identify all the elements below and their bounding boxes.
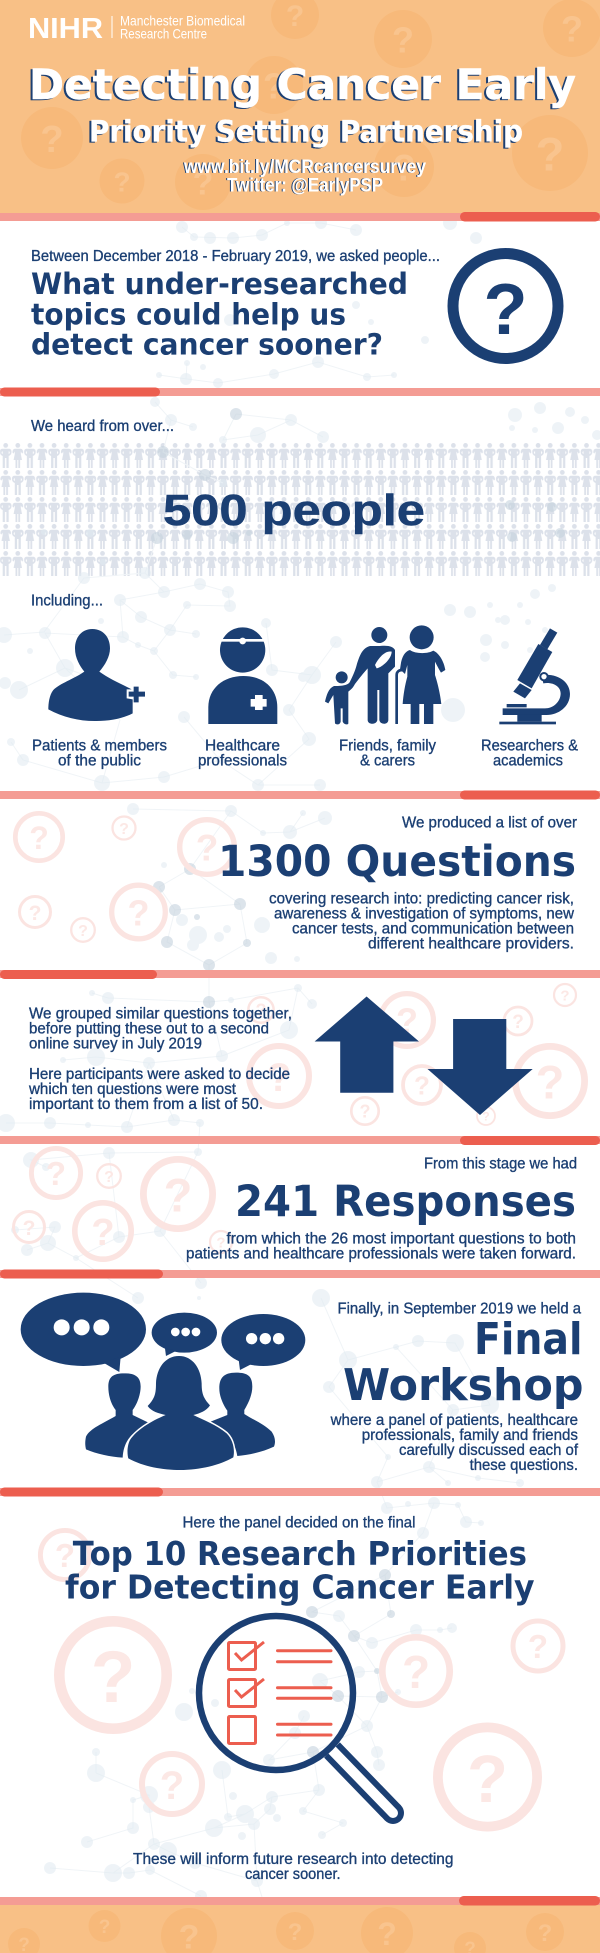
header question-mark bubbles: ? [393, 148, 415, 189]
logo: NIHR Manchester Biomedical Research Centre [28, 12, 245, 45]
footer band [0, 1905, 600, 1953]
question mark rings background: ? [91, 1637, 135, 1718]
question mark rings background: ? [256, 1001, 266, 1021]
icon: question mark ring [453, 254, 558, 358]
header question-mark bubbles: ? [536, 127, 564, 180]
label: healthcare professionals: Healthcare [205, 738, 280, 755]
divider 6 [0, 1270, 600, 1278]
icon: three people with speech bubbles [21, 1293, 305, 1470]
text: participants: which ten questions were most [28, 1081, 237, 1098]
intro sentence: Between December 2018 - February 2019, we asked people... [31, 248, 440, 265]
description: where a panel of patients, healthcare [330, 1412, 578, 1429]
question mark rings background: ? [536, 1055, 564, 1108]
question mark rings background: ? [29, 902, 41, 925]
question mark rings background: ? [360, 1102, 370, 1122]
logo: NIHR Manchester Biomedical Research Centre: Manchester Biomedical [120, 12, 245, 28]
description: professionals, family and friends [362, 1427, 578, 1444]
divider 1 [0, 212, 600, 222]
label: patients and public [32, 738, 167, 770]
lead-in text: Here the panel decided on the final [182, 1515, 416, 1532]
question mark rings background: ? [46, 1155, 66, 1192]
including text: Including... [31, 593, 103, 610]
panel: header band [0, 0, 600, 213]
question heading: What under-researched [31, 267, 408, 301]
question mark rings background: ? [23, 1217, 35, 1240]
text: participants [28, 1066, 290, 1113]
description: from which the 26 most important questions to both [226, 1230, 576, 1247]
label: healthcare professionals [198, 738, 287, 770]
logo: NIHR Manchester Biomedical Research Centre: Research Centre [120, 26, 207, 42]
header question-mark bubbles: ? [40, 119, 64, 161]
question mark rings background: ? [396, 1000, 418, 1041]
heading: Final Workshop [343, 1314, 584, 1411]
divider 2 [0, 388, 600, 396]
label: researchers and academics: Researchers & [481, 738, 578, 755]
question mark rings background: ? [560, 988, 570, 1005]
big number: 1300 Questions: 1300 Questions [218, 837, 576, 887]
question mark rings background: ? [512, 1012, 524, 1033]
header question-mark bubbles [21, 0, 600, 210]
question mark rings background: ? [482, 1109, 490, 1123]
text: grouped questions [29, 1005, 292, 1052]
panel: 1300 questions [218, 815, 578, 952]
question heading: topics could help us [31, 298, 346, 332]
heading: Top 10 Research Priorities: for Detecting Cancer Early [65, 1568, 535, 1607]
question mark rings background: ? [29, 820, 49, 856]
question mark rings background: ? [402, 1646, 430, 1698]
description: patients and healthcare professionals were taken forward. [186, 1246, 576, 1263]
label: researchers and academics [481, 738, 578, 770]
panel: second survey [28, 996, 533, 1115]
header question-mark bubbles: ? [263, 65, 285, 106]
arrow: down [428, 1019, 533, 1115]
description: these questions. [470, 1457, 578, 1474]
question mark rings background: ? [164, 1168, 192, 1221]
heading: Final Workshop: Workshop [343, 1360, 584, 1411]
subtitle: Priority Setting Partnership [89, 114, 523, 148]
panel: 241 responses [186, 1156, 577, 1263]
question mark rings background: ? [414, 1071, 430, 1101]
divider 7 [0, 1488, 600, 1496]
lead-in text: We heard from over... [31, 418, 174, 435]
icon: question mark ring: ? [484, 270, 527, 350]
label: healthcare professionals: professionals [198, 753, 287, 770]
description [269, 890, 574, 952]
text: grouped questions: online survey in July 2019 [29, 1035, 202, 1052]
arrow: up [315, 996, 419, 1093]
header question-mark bubbles: ? [193, 165, 213, 203]
label: patients and public: of the public [58, 753, 141, 770]
label: patients and public: Patients & members [32, 738, 167, 755]
header question-mark bubbles: ? [286, 0, 304, 33]
heading: Top 10 Research Priorities: Top 10 Research Priorities [73, 1534, 527, 1573]
big number: 241 Responses: 241 Responses [235, 1177, 576, 1227]
text: grouped questions: before putting these out to a second [29, 1020, 269, 1037]
question mark rings background: ? [216, 1235, 226, 1252]
footer band: ? [288, 1919, 302, 1946]
label: friends, family and carers: Friends, family [339, 738, 436, 755]
icon: friends and family [325, 625, 445, 724]
description: carefully discussed each of [399, 1442, 579, 1459]
question heading: detect cancer sooner? [31, 328, 383, 362]
description [330, 1412, 579, 1474]
panel: final workshop [21, 1293, 583, 1474]
panel: top 10 priorities [65, 1515, 535, 1883]
people crowd background [0, 443, 600, 577]
header question-mark bubbles: ? [561, 8, 583, 49]
question mark rings background: ? [104, 1169, 114, 1186]
divider 3 [0, 790, 600, 800]
question mark rings background: ? [267, 1056, 291, 1100]
description: different healthcare providers. [368, 935, 574, 952]
question mark rings background: ? [78, 923, 88, 940]
lead-in text: We produced a list of over [402, 815, 578, 832]
description: cancer tests, and communication between [292, 920, 574, 937]
text: participants: important to them from a list of 50. [29, 1096, 263, 1113]
closing text: cancer sooner. [245, 1866, 341, 1883]
icon: microscope [499, 628, 570, 724]
label: friends, family and carers: & carers [360, 753, 415, 770]
question heading [31, 267, 408, 362]
divider 8 [0, 1896, 600, 1906]
closing text: These will inform future research into detecting [133, 1851, 454, 1868]
header question-mark bubbles: ? [392, 19, 414, 60]
panel: survey question [31, 248, 558, 362]
panel: respondents [31, 418, 578, 770]
description: covering research into: predicting cancer risk, [269, 890, 574, 907]
icon: healthcare professional [208, 627, 277, 724]
logo: NIHR Manchester Biomedical Research Centre: NIHR [28, 13, 103, 45]
label: friends, family and carers [339, 738, 436, 770]
icon: patient [48, 629, 145, 721]
description: awareness & investigation of symptoms, new [274, 905, 574, 922]
survey link and twitter handle: www.bit.ly/MCRcancersurvey [183, 157, 426, 178]
header question-mark bubbles: ? [113, 166, 131, 197]
question mark rings background [14, 813, 585, 1827]
footer band: ? [99, 1917, 110, 1938]
question mark rings background: ? [528, 1628, 548, 1665]
big number: 500 people: 500 people [163, 486, 425, 535]
question mark rings background: ? [91, 1212, 115, 1254]
question mark rings background: ? [119, 821, 129, 838]
heading: Final Workshop: Final [474, 1314, 582, 1365]
survey link and twitter handle: Twitter: @EarlyPSP [227, 176, 383, 196]
lead-in text: From this stage we had [424, 1156, 577, 1173]
checklist [228, 1642, 331, 1744]
question mark rings background: ? [467, 1742, 508, 1817]
closing text [133, 1851, 454, 1883]
question mark rings background: ? [55, 1537, 75, 1574]
label: researchers and academics: academics [493, 753, 563, 770]
footer band: ? [377, 1916, 397, 1952]
divider 5 [0, 1136, 600, 1145]
icon: magnifying glass over checklist [199, 1616, 404, 1824]
question mark rings background: ? [128, 892, 150, 933]
heading: Top 10 Research Priorities [65, 1534, 535, 1607]
question mark rings background: ? [196, 828, 218, 869]
footer band: ? [538, 1920, 552, 1947]
lead-in text: Finally, in September 2019 we held a [338, 1300, 581, 1317]
description [186, 1230, 576, 1263]
divider 4 [0, 970, 600, 979]
title: Detecting Cancer Early [29, 60, 576, 109]
text: participants: Here participants were asked to decide [29, 1066, 290, 1083]
question mark rings background: ? [160, 1764, 184, 1808]
text: grouped questions: We grouped similar questions together, [29, 1005, 292, 1022]
survey link and twitter handle [183, 157, 426, 196]
